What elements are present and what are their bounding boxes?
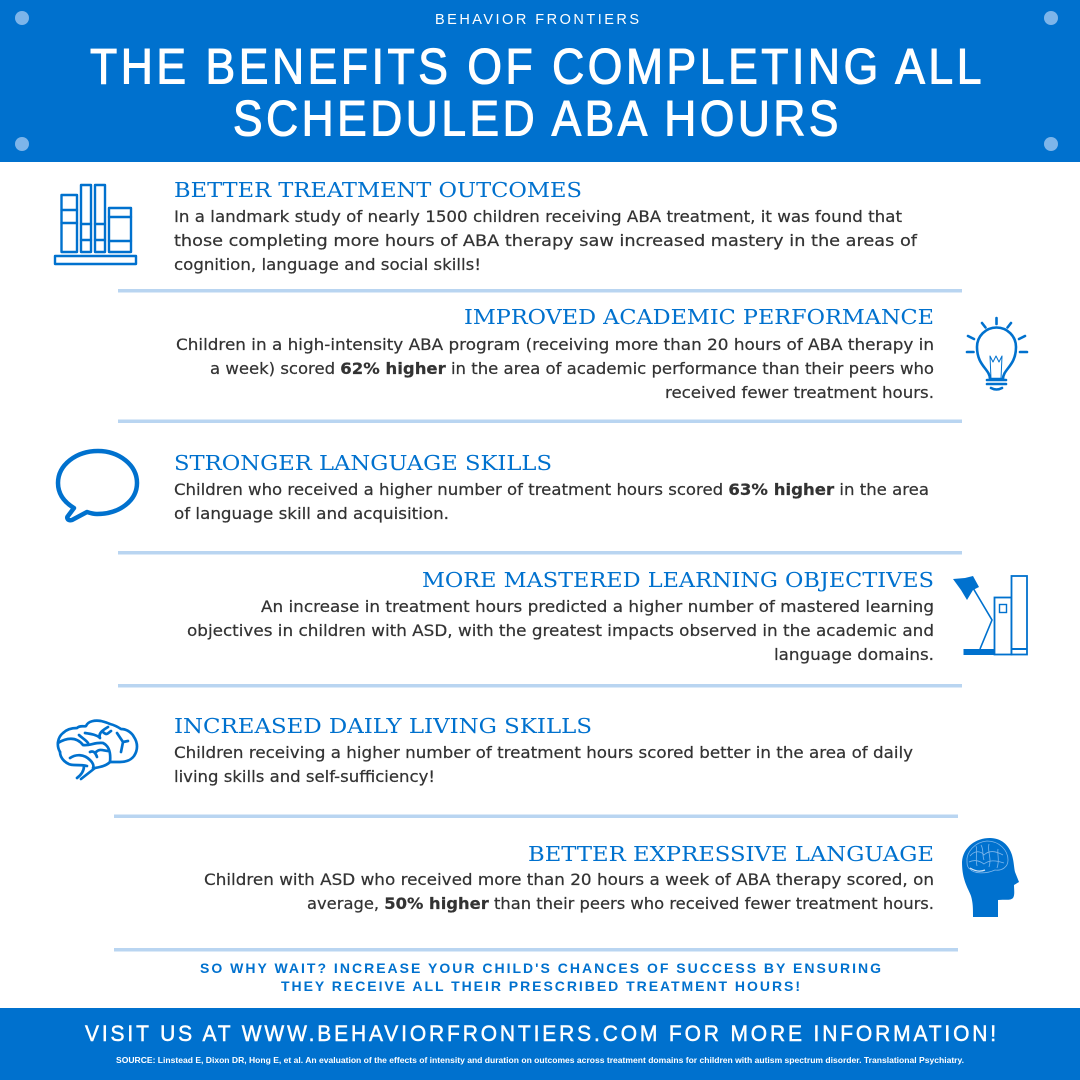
- body text: Children who received a higher number of treatment hours scored 63% higher in the area: [174, 480, 929, 499]
- body text: An increase in treatment hours predicted a higher number of mastered learning: [261, 597, 934, 616]
- body text: Children receiving a higher number of treatment hours scored better in the area of daily: [174, 743, 913, 762]
- icon: head with brain: [962, 838, 1019, 917]
- heading: MORE MASTERED LEARNING OBJECTIVES: [422, 568, 934, 592]
- section: improved academic performance: [176, 305, 1027, 402]
- heading: BETTER EXPRESSIVE LANGUAGE: [528, 842, 934, 866]
- closing call to action: THEY RECEIVE ALL THEIR PRESCRIBED TREATMENT HOURS!: [281, 978, 800, 994]
- section: more mastered learning objectives: [187, 568, 1027, 664]
- icon: desk lamp and books: [953, 576, 1027, 655]
- footer banner: [0, 1008, 1080, 1080]
- closing call to action: SO WHY WAIT? INCREASE YOUR CHILD'S CHANCES OF SUCCESS BY ENSURING: [200, 960, 881, 976]
- title: SCHEDULED ABA HOURS: [233, 90, 842, 146]
- body text: [174, 207, 917, 274]
- section: better treatment outcomes: [55, 178, 917, 274]
- section: stronger language skills: [58, 451, 929, 523]
- header banner: [0, 0, 1080, 162]
- closing call to action: [200, 960, 881, 994]
- heading: BETTER TREATMENT OUTCOMES: [174, 178, 582, 202]
- body text: [176, 335, 934, 402]
- body text: [174, 480, 929, 523]
- icon: light bulb: [967, 318, 1027, 390]
- body text: those completing more hours of ABA therapy saw increased mastery in the areas of: [174, 231, 917, 250]
- section: increased daily living skills: [58, 714, 913, 786]
- section: better expressive language: [204, 838, 1019, 917]
- heading: INCREASED DAILY LIVING SKILLS: [174, 714, 592, 738]
- body text: cognition, language and social skills!: [174, 255, 481, 274]
- body text: Children in a high-intensity ABA program (receiving more than 20 hours of ABA therapy in: [176, 335, 934, 354]
- icon: books on shelf: [55, 185, 136, 264]
- organisation name: BEHAVIOR FRONTIERS: [435, 12, 639, 28]
- body text: [174, 743, 913, 786]
- body text: living skills and self-sufficiency!: [174, 767, 435, 786]
- body text: [187, 597, 934, 664]
- body text: a week) scored 62% higher in the area of academic performance than their peers who: [210, 359, 934, 378]
- body text: average, 50% higher than their peers who received fewer treatment hours.: [307, 894, 934, 913]
- body text: [204, 870, 934, 913]
- body text: of language skill and acquisition.: [174, 504, 449, 523]
- body text: In a landmark study of nearly 1500 children receiving ABA treatment, it was found that: [174, 207, 902, 226]
- heading: STRONGER LANGUAGE SKILLS: [174, 451, 552, 475]
- title: THE BENEFITS OF COMPLETING ALL: [90, 38, 985, 94]
- body text: language domains.: [774, 645, 934, 664]
- source citation: SOURCE: Linstead E, Dixon DR, Hong E, et al. An evaluation of the effects of intensity and duration on outcomes across treatment domains for children with autism spectrum disorder. Translational Psychiatry.: [116, 1056, 964, 1065]
- body text: received fewer treatment hours.: [665, 383, 934, 402]
- icon: brain outline: [58, 721, 137, 779]
- heading: IMPROVED ACADEMIC PERFORMANCE: [464, 305, 934, 329]
- body text: objectives in children with ASD, with the greatest impacts observed in the academic and: [187, 621, 934, 640]
- website call to action: VISIT US AT WWW.BEHAVIORFRONTIERS.COM FOR MORE INFORMATION!: [85, 1021, 999, 1046]
- body text: Children with ASD who received more than 20 hours a week of ABA therapy scored, on: [204, 870, 934, 889]
- title: [90, 38, 985, 146]
- icon: speech bubble: [58, 451, 137, 520]
